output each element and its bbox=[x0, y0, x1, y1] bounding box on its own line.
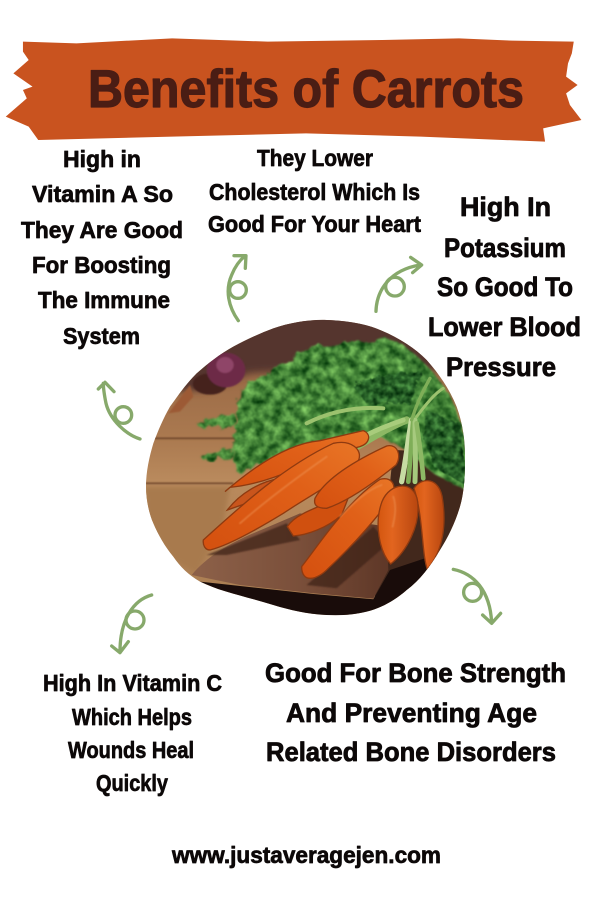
text block: cholesterol: Cholesterol Which Is bbox=[209, 179, 420, 205]
text block: vitamin A: They Are Good bbox=[21, 217, 183, 243]
text block: bone strength bbox=[265, 658, 566, 767]
title banner bbox=[6, 38, 581, 142]
carrot shadows bbox=[207, 523, 388, 588]
text block: vitamin C: Which Helps bbox=[72, 704, 192, 730]
carrot greens bbox=[234, 338, 470, 492]
text block: cholesterol bbox=[208, 145, 421, 237]
icon: arrow to vitamin C bbox=[112, 595, 152, 653]
text block: cholesterol: Good For Your Heart bbox=[208, 211, 421, 237]
text block: vitamin A: The Immune bbox=[38, 287, 170, 313]
title: Benefits of Carrots bbox=[88, 60, 524, 119]
icon: arrow to bone strength bbox=[453, 569, 501, 623]
text block: potassium: High In bbox=[460, 192, 551, 222]
onion highlight bbox=[216, 357, 234, 373]
text block: vitamin C: Quickly bbox=[96, 770, 168, 796]
onion bulb bbox=[207, 353, 245, 387]
text block: vitamin C: Wounds Heal bbox=[68, 737, 194, 763]
right carrot bbox=[414, 481, 444, 569]
text block: potassium: So Good To bbox=[437, 272, 573, 302]
text block: vitamin A bbox=[21, 146, 183, 349]
green stems bbox=[307, 378, 443, 482]
darker greens bbox=[353, 372, 468, 487]
dark right background bbox=[374, 450, 465, 597]
text block: bone strength: Related Bone Disorders bbox=[266, 737, 556, 767]
carrot photo bbox=[146, 320, 465, 616]
middle carrot bbox=[315, 446, 399, 508]
wood table bbox=[146, 320, 465, 616]
front right carrot bbox=[378, 486, 418, 564]
text block: vitamin A: For Boosting bbox=[32, 252, 171, 278]
long front carrot bbox=[302, 479, 394, 578]
text block: bone strength: Good For Bone Strength bbox=[265, 658, 566, 688]
cut vegetable at back bbox=[168, 385, 193, 413]
table plank lines bbox=[145, 438, 240, 483]
text block: vitamin A: Vitamin A So bbox=[32, 181, 173, 207]
text block: vitamin A: System bbox=[63, 323, 140, 349]
text block: vitamin C bbox=[43, 670, 222, 796]
text block: cholesterol: They Lower bbox=[257, 145, 373, 171]
top carrot bbox=[225, 431, 369, 492]
text block: potassium: Potassium bbox=[444, 233, 566, 263]
text block: vitamin C: High In Vitamin C bbox=[43, 670, 222, 696]
under carrot bbox=[286, 499, 348, 537]
brush stroke background bbox=[6, 38, 581, 142]
text block: vitamin A: High in bbox=[63, 146, 141, 172]
onion shadow bbox=[193, 373, 227, 395]
text block: potassium bbox=[428, 192, 581, 382]
speckled front wood bbox=[145, 487, 230, 573]
back wall bbox=[178, 320, 438, 396]
board front edge bbox=[200, 553, 440, 620]
text block: bone strength: And Preventing Age bbox=[286, 698, 537, 728]
cutting board bbox=[192, 513, 388, 599]
carrots bbox=[203, 431, 444, 578]
big carrot bbox=[203, 442, 359, 550]
stray leaves bbox=[197, 413, 235, 460]
text block: potassium: Lower Blood bbox=[428, 312, 581, 342]
icon: arrow to potassium bbox=[376, 257, 422, 311]
icon: arrow to cholesterol bbox=[228, 256, 246, 321]
text block: potassium: Pressure bbox=[446, 352, 556, 382]
icon: arrow to vitamin A bbox=[98, 382, 140, 439]
red onion bbox=[193, 353, 245, 395]
website url: www.justaveragejen.com bbox=[171, 842, 441, 868]
carrot highlights bbox=[240, 457, 395, 527]
small back carrot bbox=[227, 478, 280, 510]
